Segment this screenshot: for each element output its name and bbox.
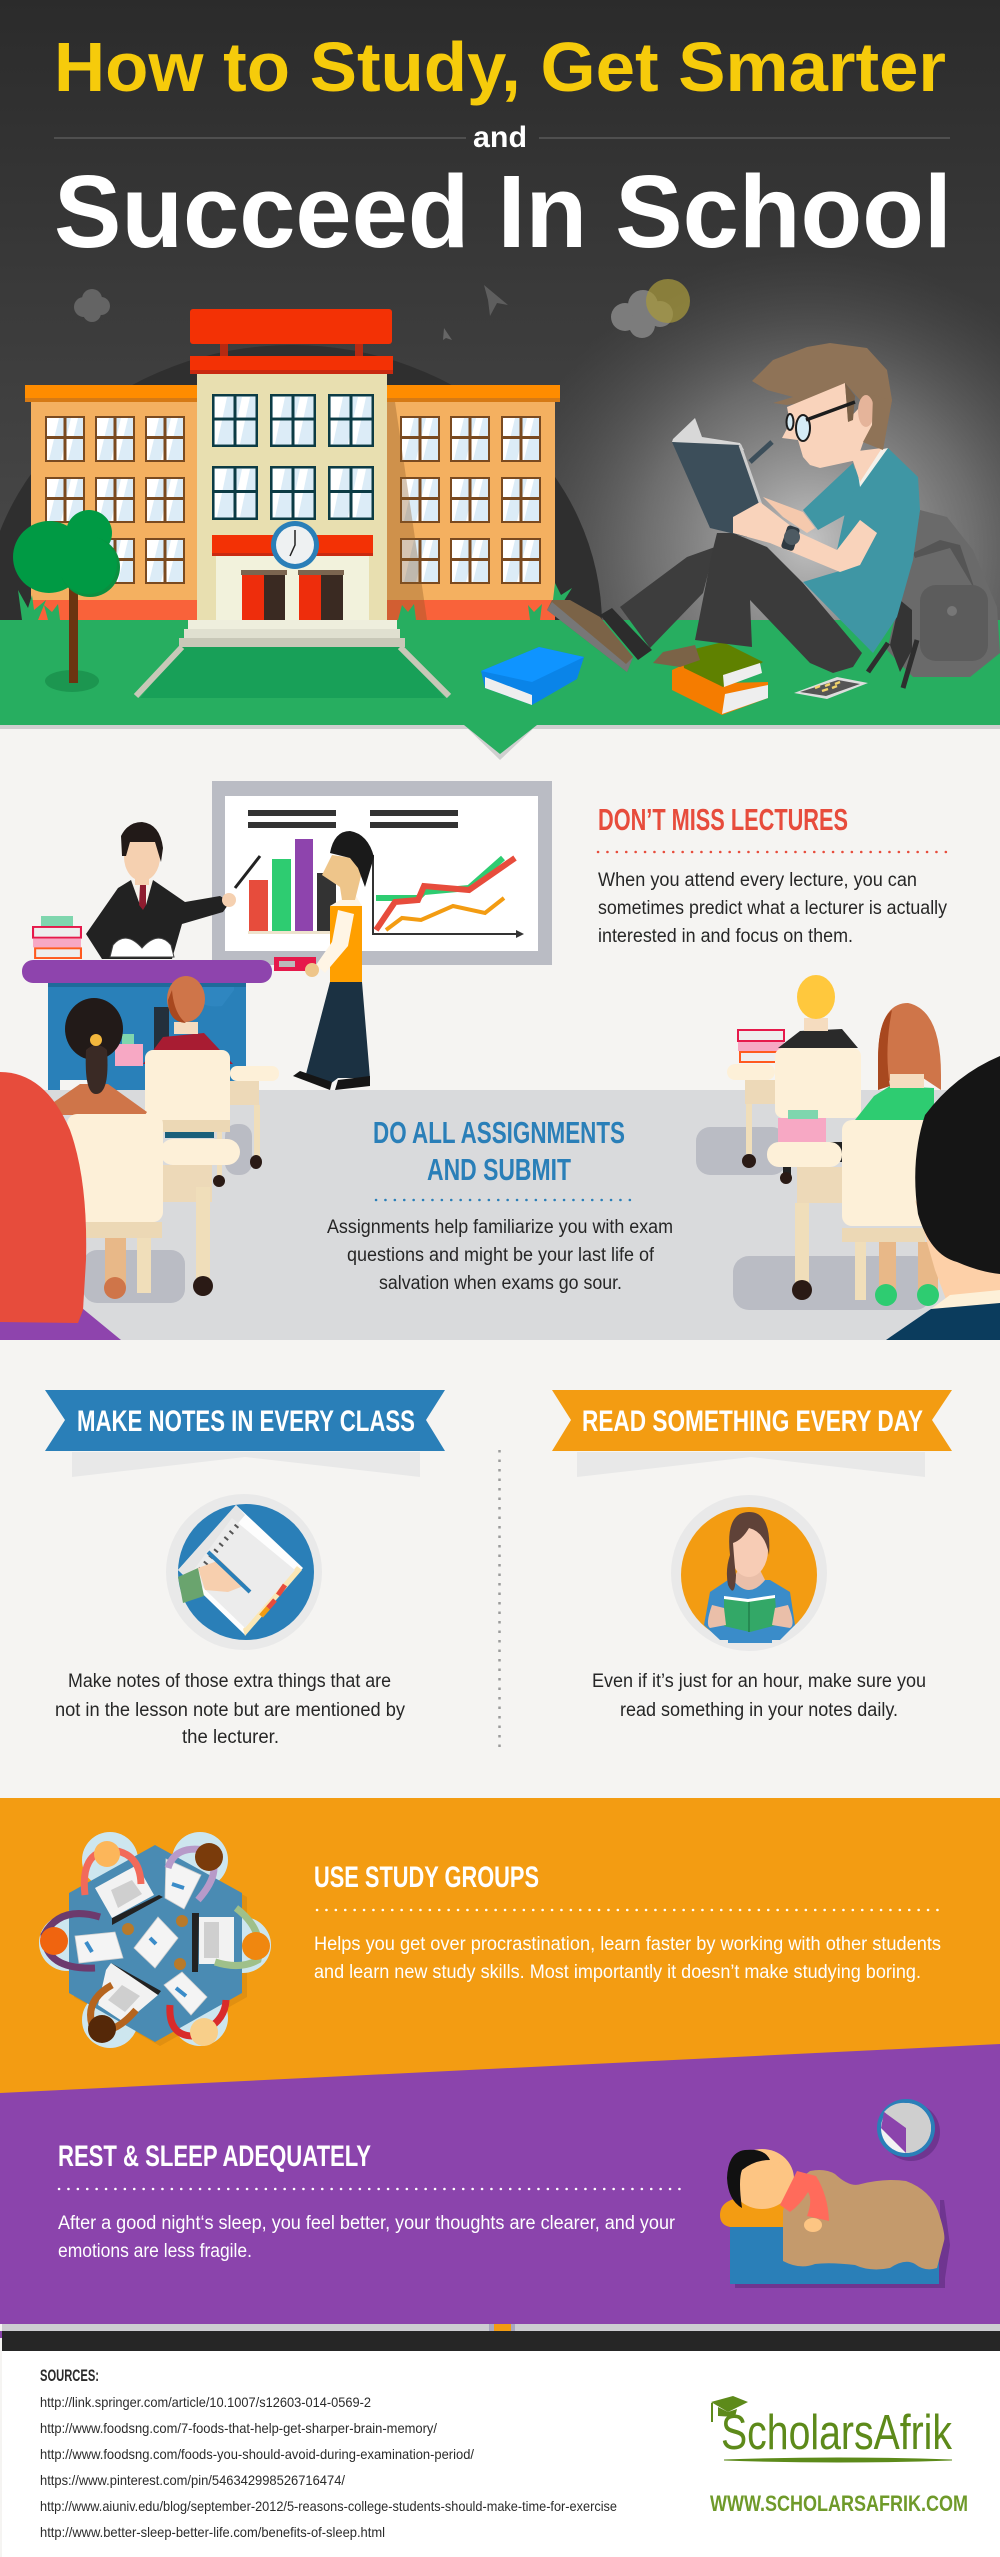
footer bars (0, 2324, 1000, 2351)
icon: books on grass (481, 642, 868, 715)
panel: classroom (0, 781, 1000, 1340)
body text: salvation when exams go sour. (379, 1273, 622, 1294)
panel: rest and sleep (0, 2044, 1000, 2324)
glasses (786, 402, 855, 441)
body text: sometimes predict what a lecturer is actually (598, 898, 947, 919)
body text (58, 2213, 676, 2262)
icon: girl reading (671, 1495, 827, 1651)
trailing leg and shoe (547, 547, 715, 672)
panel: make notes (45, 1390, 445, 1748)
heading: AND SUBMIT (427, 1152, 571, 1187)
icon: tree (13, 510, 120, 692)
body text: Even if it’s just for an hour, make sure you (592, 1671, 926, 1692)
bottom edge of header with notch (0, 725, 1000, 760)
icon: wall clock (877, 2099, 940, 2161)
heading: DO ALL ASSIGNMENTS (373, 1115, 625, 1150)
source links: http://www.better-sleep-better-life.com/benefits-of-sleep.html (40, 2524, 385, 2540)
body text: emotions are less fragile. (58, 2241, 252, 2262)
title (54, 28, 952, 269)
dotted divider (498, 1450, 501, 1753)
body text: and learn new study skills. Most importantly it doesn’t make studying boring. (314, 1962, 921, 1983)
heading: USE STUDY GROUPS (314, 1861, 539, 1894)
source links (40, 2394, 617, 2540)
body text: When you attend every lecture, you can (598, 870, 917, 891)
heads (40, 1841, 270, 2046)
icon: study group table (39, 1832, 271, 2048)
ribbon heading (552, 1390, 952, 1477)
icon: sleeping person (720, 2149, 950, 2288)
shoe second (653, 645, 700, 667)
seated student B (115, 976, 279, 1187)
source links: http://www.foodsng.com/foods-you-should-avoid-during-examination-period/ (40, 2446, 474, 2462)
arm behind book (763, 497, 815, 533)
source links: https://www.pinterest.com/pin/546342998526716474/ (40, 2472, 345, 2488)
body text: Assignments help familiarize you with exam (327, 1217, 673, 1238)
icon: notebook (166, 1494, 322, 1650)
icon: clouds and moon (74, 279, 690, 340)
panel: do all assignments (327, 1115, 673, 1294)
papers (75, 1859, 207, 2015)
logo (710, 2396, 968, 2516)
backpack (868, 510, 1000, 688)
icon: seated students left (0, 976, 279, 1340)
icon: seated students right (696, 975, 1000, 1340)
front leg (695, 533, 862, 673)
title line 3: Succeed In School (54, 154, 952, 269)
icon: standing student (274, 831, 374, 1090)
sources heading: SOURCES: (40, 2366, 99, 2385)
body text: Helps you get over procrastination, learn faster by working with other students (314, 1934, 941, 1955)
left sleeve (803, 463, 858, 530)
foreground figure red hair (0, 1072, 121, 1340)
book and pen (672, 418, 772, 537)
title line 1: How to Study, Get Smarter (54, 28, 946, 106)
icon: desk books (33, 916, 81, 958)
body text: After a good night‘s sleep, you feel better, your thoughts are clearer, and your (58, 2213, 676, 2234)
grass (0, 620, 1000, 725)
title line 2 and rules: and (473, 121, 527, 154)
body text (592, 1671, 926, 1721)
icon: steps and path (136, 620, 449, 698)
panel: header scene (0, 0, 1000, 725)
icon: grass tufts (18, 583, 572, 620)
body text (55, 1671, 405, 1748)
icon: school building (25, 309, 560, 620)
body text: the lecturer. (182, 1727, 279, 1748)
hair (752, 343, 892, 450)
laptops (95, 1865, 234, 2023)
arm (733, 502, 877, 572)
icon: lectern (22, 960, 272, 1090)
panel: sources footer (2, 2351, 1000, 2557)
floor (0, 1090, 1000, 1340)
shirt (803, 448, 920, 653)
body text (327, 1217, 673, 1294)
seated student C (696, 975, 861, 1175)
source links: http://www.aiuniv.edu/blog/september-2012/5-reasons-college-students-should-make-time-for-exercise (40, 2498, 617, 2514)
icon: clock (271, 521, 319, 569)
body text: Make notes of those extra things that are (68, 1671, 391, 1692)
watch (781, 525, 800, 552)
ribbon heading: MAKE NOTES IN EVERY CLASS (77, 1405, 415, 1438)
body text (598, 870, 947, 947)
heading (373, 1115, 625, 1187)
seated student A (54, 998, 240, 1303)
ribbon heading (45, 1390, 445, 1477)
panel: read something (552, 1390, 952, 1721)
icon: open book (110, 938, 174, 957)
body text (314, 1934, 941, 1983)
whiteboard (212, 781, 552, 965)
body text: questions and might be your last life of (347, 1245, 655, 1266)
icon: student reading (547, 343, 1000, 688)
seated people arms (44, 1849, 259, 2036)
icon: teacher (86, 822, 260, 959)
heading: REST & SLEEP ADEQUATELY (58, 2140, 371, 2173)
panel: use study groups (0, 1798, 1000, 2095)
panel: don't miss lectures (598, 802, 950, 947)
face (782, 383, 874, 468)
foreground figure black hair (886, 1056, 1000, 1340)
neck and collar (855, 448, 888, 487)
source links: http://link.springer.com/article/10.1007/s12603-014-0569-2 (40, 2394, 371, 2410)
body text: interested in and focus on them. (598, 926, 853, 947)
heading: DON’T MISS LECTURES (598, 802, 848, 837)
body text: read something in your notes daily. (620, 1700, 898, 1721)
dark hill behind school (0, 345, 602, 620)
seated student D (733, 1003, 941, 1310)
source links: http://www.foodsng.com/7-foods-that-help-get-sharper-brain-memory/ (40, 2420, 437, 2436)
body text: not in the lesson note but are mentioned by (55, 1700, 405, 1721)
